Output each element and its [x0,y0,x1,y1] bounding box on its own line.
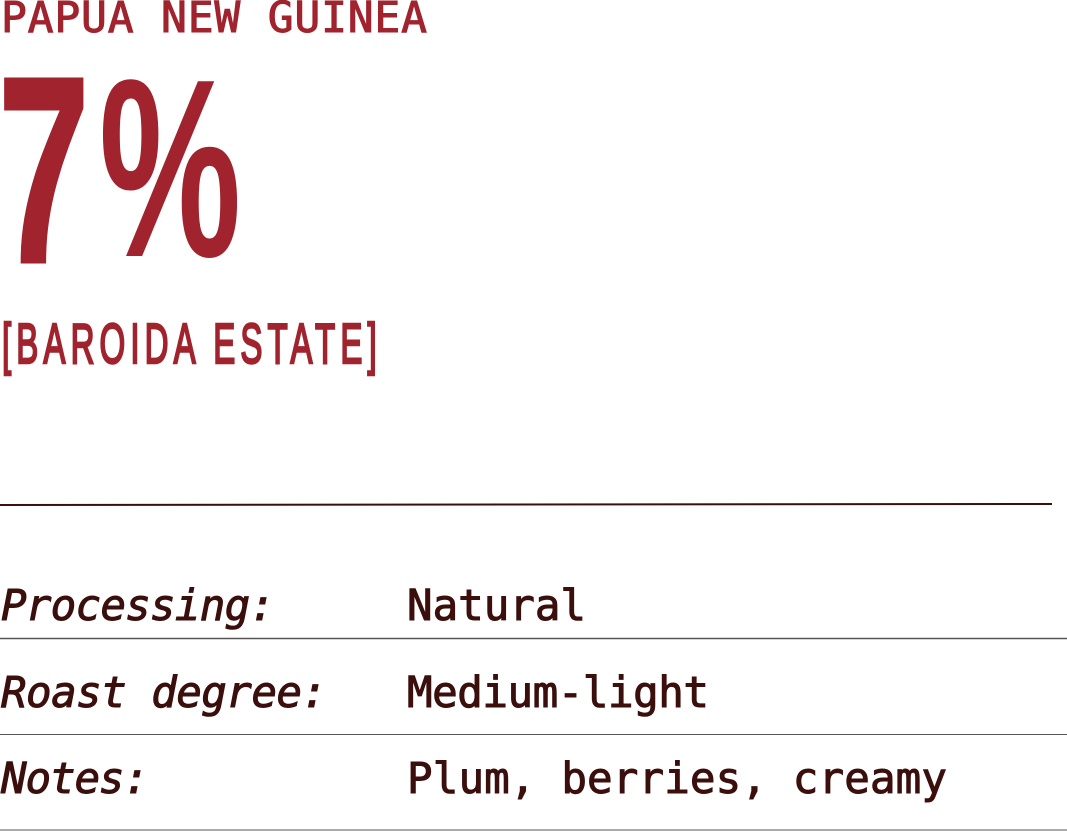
big percentage [0,22,241,318]
big percentage: % [99,26,241,310]
row: processing: Natural [407,582,586,631]
subheading: estate: [BAROIDA ESTATE] [2,312,377,375]
big percentage: 7 [0,22,90,318]
row: roast degree [0,669,1067,734]
row: roast degree: Roast degree: [1,669,327,718]
row: notes: Notes: [0,755,149,804]
section divider [0,504,1052,505]
row: notes: Plum, berries, creamy [407,755,947,804]
row: notes [0,755,1067,830]
row: roast degree: Medium-light [407,669,709,718]
row: processing [0,582,1067,638]
row: processing: Processing: [1,582,275,631]
